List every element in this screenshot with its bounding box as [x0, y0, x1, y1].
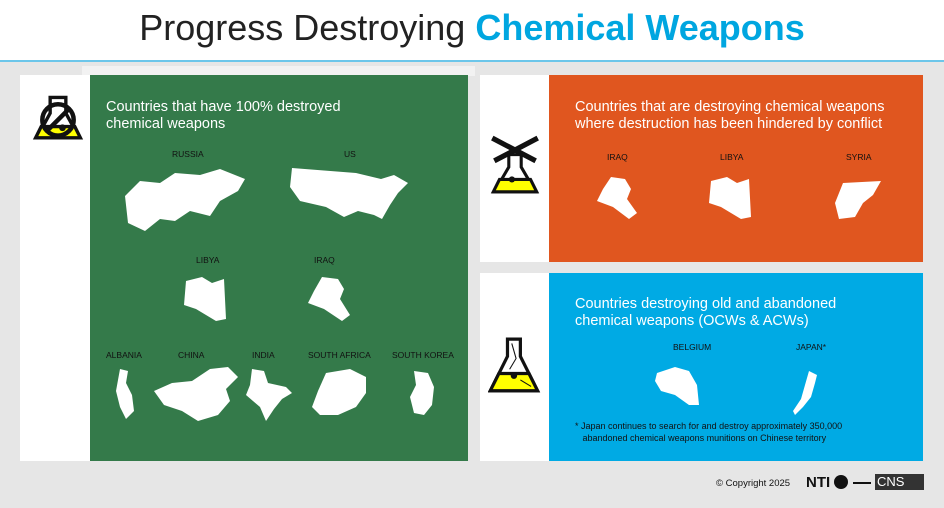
green area: US: [344, 149, 356, 159]
heading: [575, 296, 836, 329]
footer: copyright and logos: © Copyright 2025: [716, 478, 790, 489]
green area: LIBYA: [196, 255, 219, 265]
footnote: [575, 421, 842, 443]
blue area: [549, 273, 923, 461]
green area: SOUTH KOREA: [392, 350, 454, 360]
heading: [575, 99, 884, 132]
heading: Countries destroying old and abandoned: [575, 296, 836, 312]
orange area: [549, 75, 923, 262]
panel: hindered by conflict: [480, 75, 923, 262]
green area: SOUTH AFRICA: [308, 350, 371, 360]
icon: flask with guns: [490, 136, 540, 194]
title: Progress Destroying Chemical Weapons: [139, 7, 805, 48]
heading: chemical weapons: [106, 116, 225, 132]
panel: old and abandoned: [480, 273, 923, 461]
green area: ALBANIA: [106, 350, 142, 360]
green area: [90, 75, 468, 461]
heading: Countries that are destroying chemical weapons: [575, 99, 884, 115]
orange area: SYRIA: [846, 152, 872, 162]
heading: [106, 99, 341, 132]
heading: chemical weapons (OCWs & ACWs): [575, 313, 809, 329]
footer: copyright and logos: [716, 474, 924, 491]
header: [0, 0, 944, 62]
icon: cracked flask: [488, 338, 540, 392]
icon: crossed flask: [32, 96, 84, 140]
green area: CHINA: [178, 350, 204, 360]
footer: copyright and logos: NTI: [806, 474, 830, 491]
green area: IRAQ: [314, 255, 335, 265]
orange area: IRAQ: [607, 152, 628, 162]
footnote: abandoned chemical weapons munitions on Chinese territory: [582, 433, 826, 443]
footer: copyright and logos: CNS: [877, 474, 904, 489]
heading: where destruction has been hindered by conflict: [575, 116, 882, 132]
footnote: * Japan continues to search for and destroy approximately 350,000: [575, 421, 842, 431]
maps: RUSSIA: [172, 149, 204, 159]
panel: destroyed: [20, 75, 468, 461]
green area: INDIA: [252, 350, 275, 360]
blue area: BELGIUM: [673, 342, 711, 352]
orange area: LIBYA: [720, 152, 743, 162]
blue area: JAPAN*: [796, 342, 826, 352]
heading: Countries that have 100% destroyed: [106, 99, 341, 115]
